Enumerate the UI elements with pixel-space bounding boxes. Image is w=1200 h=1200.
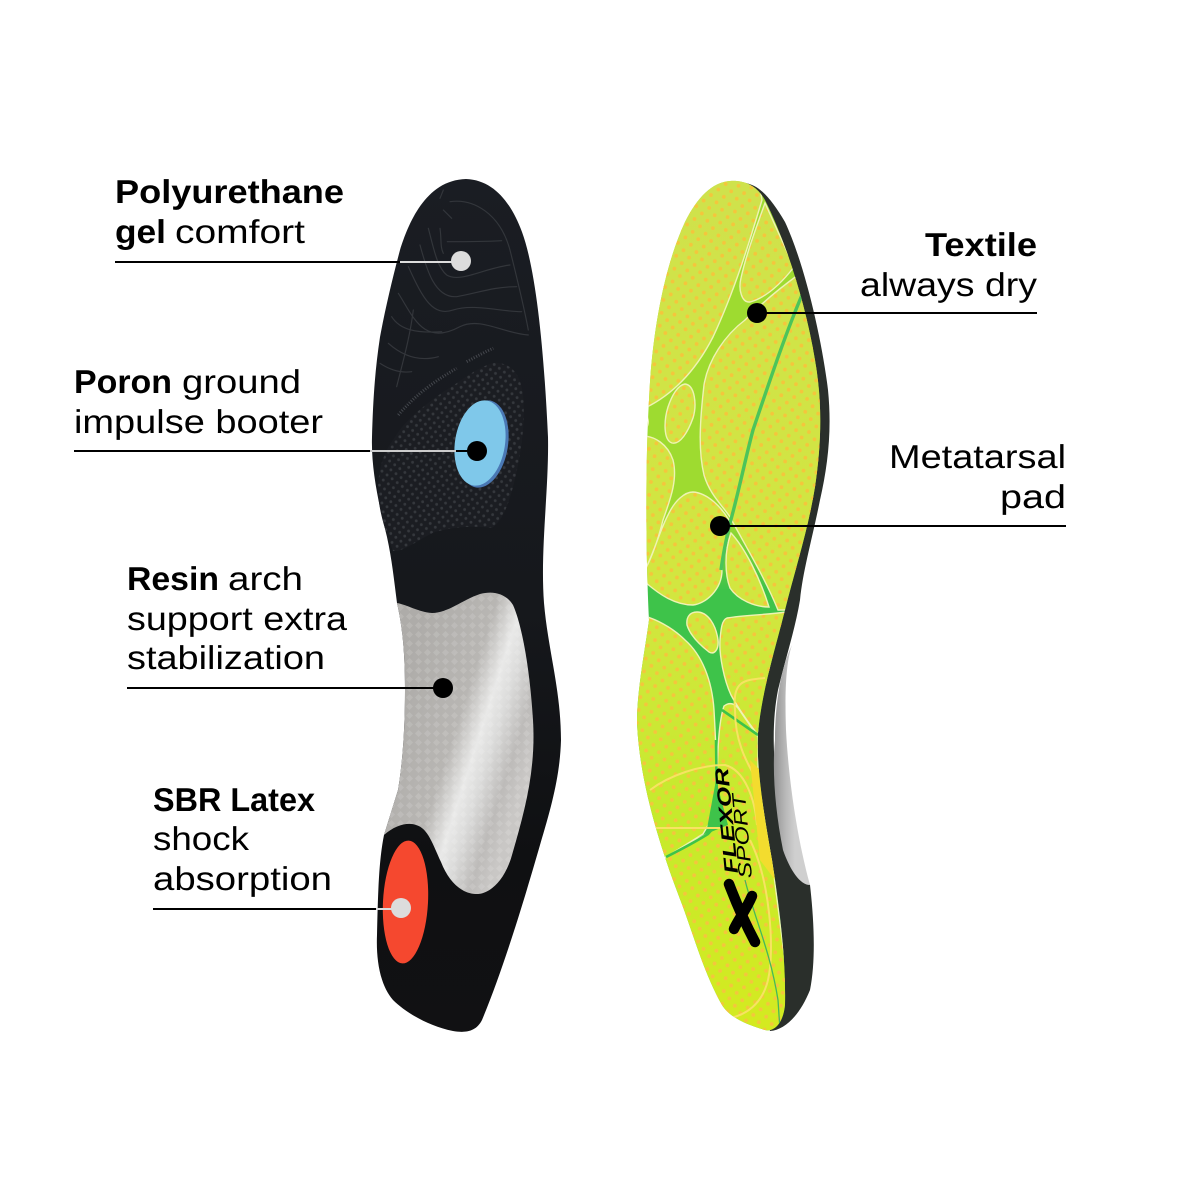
- label text: pad: [1000, 478, 1066, 515]
- arch plate seen from the side: [774, 645, 810, 885]
- label text: [127, 560, 348, 676]
- callout: resin arch: [127, 560, 453, 698]
- label text: [153, 781, 332, 897]
- label text: always dry: [860, 266, 1038, 303]
- label text: absorption: [153, 860, 332, 897]
- label text: Metatarsal: [889, 438, 1066, 475]
- leader line: [757, 312, 1037, 314]
- FLEXOR SPORT logo: [712, 767, 757, 942]
- toe tread lines: [380, 190, 528, 387]
- carbon resin arch plate: [384, 593, 533, 894]
- orange dot texture: [637, 182, 820, 1030]
- left insole: underside: [372, 179, 561, 1032]
- callout: polyurethane gel: [115, 173, 471, 271]
- leader line on pad: [456, 450, 477, 452]
- marker dot: [747, 303, 767, 323]
- leader line: [74, 450, 370, 452]
- leader line: [153, 908, 376, 910]
- label text: comfort: [175, 213, 305, 250]
- yellow side band: [750, 760, 775, 880]
- leader line on sole: [400, 261, 452, 263]
- label text: support extra: [127, 600, 348, 637]
- leader line: [720, 525, 1066, 527]
- poron blue pad: [449, 397, 515, 491]
- label text: Textile: [925, 226, 1037, 263]
- label text: SBR Latex: [153, 781, 316, 818]
- label text: impulse booter: [74, 403, 323, 440]
- label text: ground: [182, 363, 301, 400]
- marker dot: [433, 678, 453, 698]
- textile cells: [637, 180, 820, 1030]
- lower green strip: [666, 710, 758, 857]
- callout: poron: [74, 363, 487, 461]
- marker dot: [710, 516, 730, 536]
- dark base edge: [740, 183, 830, 1031]
- label text: shock: [153, 820, 250, 857]
- logo mark: [729, 884, 755, 942]
- leader line: [115, 261, 400, 263]
- SBR latex red heel pad: [380, 839, 431, 965]
- leader line on sole: [370, 450, 456, 452]
- label text: Polyurethane: [115, 173, 344, 210]
- logo wordmark FLEXOR: FLEXOR: [712, 767, 743, 875]
- label text: [115, 173, 344, 250]
- marker dot: [391, 898, 411, 918]
- forefoot dotted pad: [378, 363, 524, 551]
- textile surface: [637, 180, 820, 1030]
- label text: gel: [115, 213, 166, 250]
- label text: [860, 226, 1038, 303]
- pad lettering relief: [398, 348, 493, 415]
- label text: arch: [228, 560, 303, 597]
- leader line on pad: [376, 908, 395, 910]
- lower junction blob: [706, 780, 728, 834]
- right insole: top side: [637, 180, 830, 1031]
- callout: metatarsal pad: [710, 438, 1066, 536]
- marker dot: [467, 441, 487, 461]
- cell outlines: [647, 193, 796, 959]
- label text: [74, 363, 323, 440]
- leader line: [127, 687, 443, 689]
- marker dot: [451, 251, 471, 271]
- sole outline: [372, 179, 561, 1032]
- label text: [889, 438, 1066, 515]
- yellow overlay curves: [650, 678, 771, 1018]
- label text: Resin: [127, 560, 219, 597]
- green stripe: [721, 295, 802, 570]
- thin lower green line: [745, 880, 780, 1030]
- callout: textile: [747, 226, 1038, 323]
- callout: SBR latex: [153, 781, 411, 918]
- green network: [637, 180, 820, 1030]
- logo wordmark SPORT: SPORT: [729, 791, 757, 879]
- label text: stabilization: [127, 639, 325, 676]
- label text: Poron: [74, 363, 172, 400]
